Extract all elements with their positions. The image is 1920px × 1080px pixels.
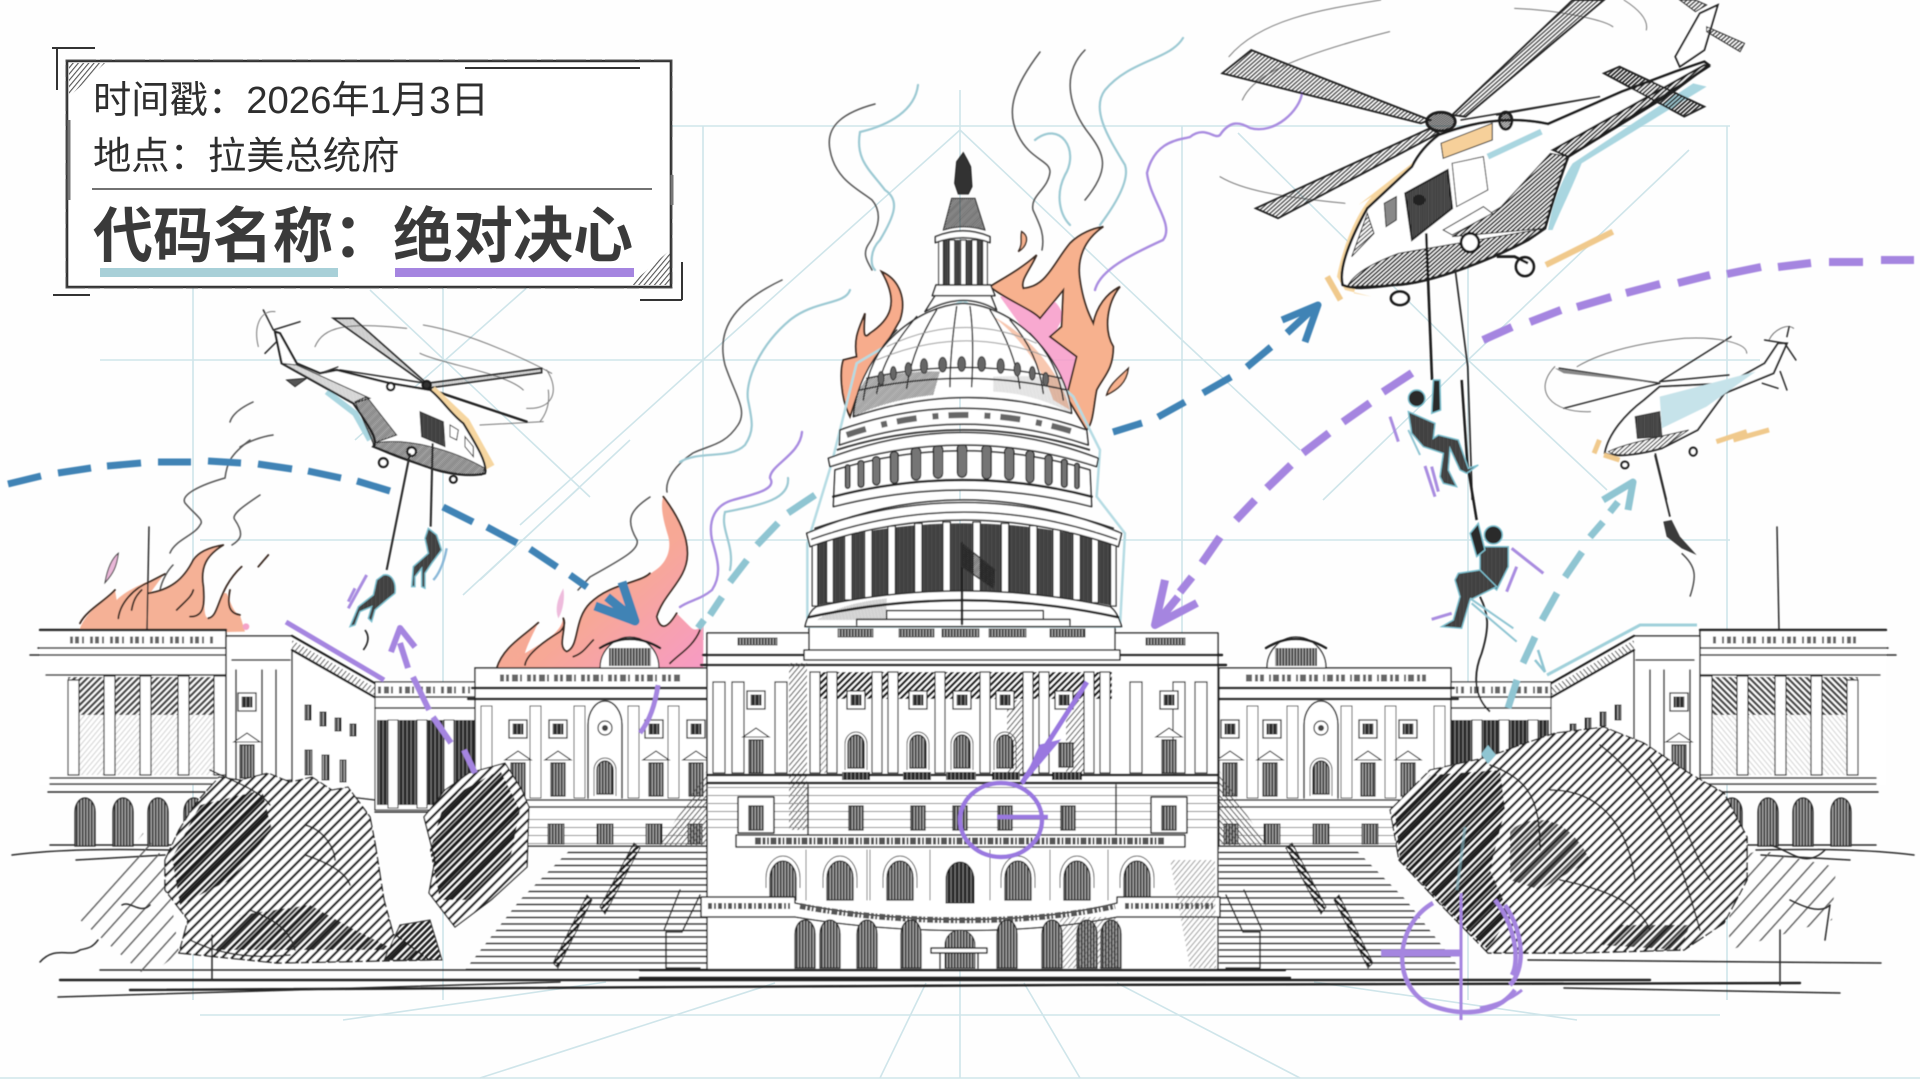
rotor blades xyxy=(1222,50,1430,123)
ropes xyxy=(1426,233,1432,380)
tree: east large xyxy=(1390,727,1747,953)
orange speed lines xyxy=(1327,232,1613,300)
capitol dome xyxy=(805,153,1125,627)
tree: west large xyxy=(165,773,429,963)
drum windows xyxy=(845,444,1079,489)
west wing xyxy=(12,527,709,970)
purple arrow, west xyxy=(286,622,658,773)
orange highlight xyxy=(430,392,488,468)
arrowhead xyxy=(1282,305,1318,342)
fuselage xyxy=(1605,343,1787,455)
balustrade xyxy=(736,835,1185,847)
title card xyxy=(52,48,682,300)
card frame xyxy=(52,48,682,300)
timestamp: 时间戳：2026年1月3日 xyxy=(93,79,489,122)
motion lines xyxy=(348,575,367,608)
dome collar xyxy=(925,293,997,312)
rotor and arcs xyxy=(1559,337,1731,408)
tail bits xyxy=(1762,327,1796,390)
target reticle, capitol xyxy=(960,682,1087,857)
orange highlight xyxy=(1337,122,1492,297)
ground lines xyxy=(60,980,1800,990)
rusticated storey xyxy=(707,785,1218,835)
dome shell xyxy=(853,303,1072,417)
code name: 代码名称：绝对决心 xyxy=(93,203,633,270)
fuselage xyxy=(275,332,485,475)
light blue flight path, east xyxy=(1457,482,1697,890)
blue wash xyxy=(1660,372,1756,428)
colonnade columns xyxy=(713,672,1207,773)
ground arcade xyxy=(795,917,1121,968)
flames on the west block xyxy=(497,497,703,678)
tree: far east faint xyxy=(1729,850,1836,950)
arcade storey xyxy=(766,850,1154,903)
lower hull hatching xyxy=(373,442,485,475)
cornice xyxy=(701,655,1226,665)
arrowhead xyxy=(391,628,415,652)
wheels and rotor hub xyxy=(1391,112,1534,305)
soldier lower xyxy=(1442,523,1508,628)
rear hull hatching xyxy=(355,397,397,443)
drum cornice xyxy=(828,432,1098,467)
flame: small sparks xyxy=(1018,232,1128,395)
shrub: west base xyxy=(384,920,442,960)
tail fin and tail rotor xyxy=(1675,5,1718,67)
small soldier xyxy=(1663,520,1697,555)
lower terrace balustrade xyxy=(701,897,1220,930)
tree: far west faint xyxy=(80,833,179,977)
tail rotor xyxy=(263,310,300,353)
engine bay skid door xyxy=(1443,207,1492,235)
fuselage xyxy=(1342,62,1709,288)
facade wall xyxy=(707,653,1218,970)
soldier upper xyxy=(1408,380,1478,487)
blue under-shadow xyxy=(1548,83,1707,230)
rotor sweep arcs xyxy=(1220,0,1647,203)
blue flight path, west xyxy=(8,461,635,621)
underline: code name label xyxy=(100,268,338,277)
dome oculi xyxy=(878,357,1049,386)
flame: pink core xyxy=(1000,293,1077,397)
door xyxy=(420,412,445,447)
drum ring xyxy=(807,500,1122,547)
underline: code name value xyxy=(395,268,634,277)
arrowhead xyxy=(595,582,635,621)
motion lines xyxy=(1390,417,1543,619)
cabin roof xyxy=(1441,123,1492,158)
hull hatching xyxy=(1608,430,1689,455)
helicopter: small, right xyxy=(1545,327,1796,500)
flanking stairs xyxy=(664,890,1262,968)
rear hull hatching xyxy=(1452,153,1568,237)
door xyxy=(1635,412,1662,438)
wheels xyxy=(1621,462,1628,468)
dome base xyxy=(805,591,1122,627)
upper windows xyxy=(743,691,1182,773)
flames on the west wing roof xyxy=(80,545,268,635)
rope xyxy=(1655,453,1666,500)
flame: left xyxy=(841,272,903,417)
rotor blades xyxy=(333,318,427,385)
ropes xyxy=(387,443,433,570)
rotor arcs xyxy=(315,325,553,425)
central capitol block xyxy=(640,627,1290,978)
dome blue halo xyxy=(807,300,1125,627)
door and crew xyxy=(1405,170,1452,240)
soldier two xyxy=(412,528,442,588)
attic xyxy=(707,633,1218,655)
flames behind the dome xyxy=(841,227,1128,430)
hatched trees xyxy=(40,727,1836,985)
smoke plumes xyxy=(160,38,1302,607)
windows xyxy=(450,425,473,457)
rope xyxy=(1462,380,1477,520)
tholos lantern xyxy=(932,153,995,296)
soldier one xyxy=(350,575,395,627)
stabilizer xyxy=(287,367,338,387)
east wing xyxy=(1217,527,1914,970)
orange speed marks xyxy=(1594,430,1769,460)
location: 地点：拉美总统府 xyxy=(93,135,399,178)
tail boom xyxy=(1553,65,1709,157)
purple flight path, long xyxy=(1155,260,1914,625)
statue of freedom xyxy=(955,153,972,194)
helicopter: large, upper right xyxy=(1220,0,1745,500)
arrowhead xyxy=(1603,482,1633,510)
arrowhead xyxy=(1155,580,1197,625)
light blue flight path, centre xyxy=(698,495,815,628)
tree: west small xyxy=(424,763,529,927)
tail boom xyxy=(282,363,370,403)
horizontal stabilizer xyxy=(1604,67,1704,117)
wheels and hub xyxy=(379,381,457,483)
colonnade drum xyxy=(812,522,1117,607)
blue shadow xyxy=(327,392,370,440)
blue flight path, east xyxy=(1113,305,1318,432)
target reticle, ground xyxy=(1381,893,1522,1020)
rope lower xyxy=(1476,597,1490,712)
balcony xyxy=(707,775,1218,783)
cockpit windows xyxy=(1384,197,1396,227)
rappelling soldiers, centre right xyxy=(1390,380,1697,712)
window panel xyxy=(1452,157,1488,207)
west and east wings xyxy=(12,527,1914,997)
helicopter: left xyxy=(257,310,553,650)
flame: right xyxy=(990,227,1120,430)
colonnade shade xyxy=(812,672,1112,699)
lower hull hatching xyxy=(1347,228,1546,287)
flag xyxy=(962,543,995,624)
